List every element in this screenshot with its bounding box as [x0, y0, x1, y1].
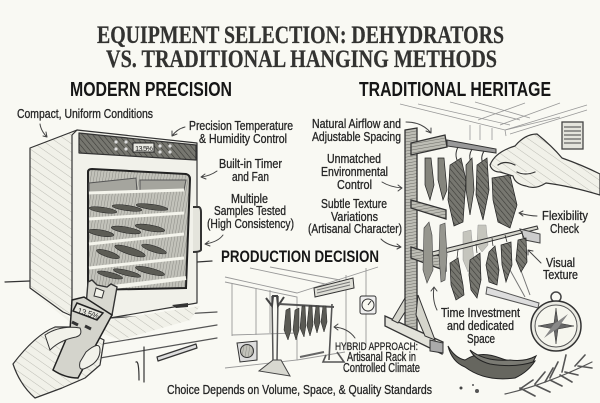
label: time investment: Time Investment	[441, 306, 520, 320]
wall climate unit	[237, 341, 257, 362]
heading: production decision: PRODUCTION DECISION	[221, 247, 379, 266]
illustration: rosemary sprig	[505, 355, 592, 396]
illustration: attic room	[400, 102, 587, 149]
label: unmatched environmental control: Unmatched	[327, 152, 381, 166]
label: compact, uniform conditions: Compact, Uniform Conditions	[17, 107, 153, 121]
display: 13.5%	[135, 144, 153, 153]
back lower jerky	[423, 222, 447, 283]
label: flexibility check	[519, 209, 589, 236]
label: subtle texture variations: (Artisanal Character)	[308, 222, 402, 236]
background lower rack	[486, 268, 539, 308]
title	[97, 22, 504, 73]
window with racks	[88, 169, 190, 290]
label: visual texture: Texture	[543, 268, 578, 282]
label: natural airflow: Natural Airflow and	[312, 117, 401, 131]
heading: modern precision: MODERN PRECISION	[70, 79, 232, 101]
label: built-in timer: Built-in Timer	[219, 157, 282, 171]
illustration: controlled climate room	[225, 267, 378, 376]
label: built-in timer: and Fan	[232, 170, 269, 184]
label: precision temperature: & Humidity Control	[199, 132, 287, 146]
title: EQUIPMENT SELECTION: DEHYDRATORS	[97, 22, 504, 49]
illustration: hanging rack	[385, 128, 540, 354]
faint background jerky	[463, 225, 488, 272]
label: precision temperature	[172, 119, 293, 146]
compass	[531, 292, 581, 351]
label: built-in timer	[201, 157, 282, 184]
label: natural airflow	[312, 117, 431, 144]
wall AC vent	[314, 278, 354, 297]
upper jerky row	[425, 158, 517, 228]
dehydrator front body	[72, 130, 197, 318]
label: visual texture: Visual	[546, 256, 575, 270]
meter screen: 13.5%	[76, 306, 100, 321]
shadow under dehydrator	[30, 290, 200, 340]
illustration: hand holding jerky	[490, 134, 600, 195]
heading: traditional heritage: TRADITIONAL HERITAGE	[359, 79, 551, 101]
label: visual texture	[528, 250, 578, 282]
label: subtle texture variations: Subtle Texture	[321, 197, 387, 211]
illustration: chili peppers	[448, 346, 536, 393]
label: precision temperature: Precision Temperature	[189, 119, 293, 133]
counter and cabinet	[5, 261, 217, 382]
label: hybrid approach: HYBRID APPROACH:	[335, 341, 418, 353]
label: hybrid approach: Artisanal Rack in	[347, 350, 416, 364]
thumb and fingers	[45, 327, 81, 350]
wall vent	[562, 122, 583, 149]
label: unmatched environmental control: Control	[337, 178, 372, 192]
label: multiple samples tested: Multiple	[231, 192, 268, 206]
rack post	[405, 128, 417, 335]
label: time investment: and dedicated	[447, 319, 514, 333]
rack base	[385, 295, 443, 354]
dehydrator foot	[172, 303, 188, 308]
label: flexibility check: Flexibility	[542, 209, 589, 223]
label: flexibility check: Check	[550, 222, 580, 236]
label: multiple samples tested: (High Consistency)	[207, 217, 294, 231]
footer note: Choice Depends on Volume, Space, & Quality Standards	[167, 383, 432, 397]
room walls	[225, 267, 378, 368]
mini jerky	[284, 306, 327, 340]
wall gauge	[360, 296, 376, 314]
label: natural airflow: Adjustable Spacing	[312, 130, 401, 144]
title: VS. TRADITIONAL HANGING METHODS	[106, 46, 497, 73]
label: time investment	[431, 287, 520, 346]
label: subtle texture variations: Variations	[331, 210, 378, 224]
label: hybrid approach: Controlled Climate	[343, 361, 420, 375]
door handle	[193, 207, 201, 252]
label: hybrid approach	[334, 324, 420, 375]
mini rack	[259, 296, 344, 376]
jerky on racks	[88, 202, 168, 281]
illustration: dehydrator	[30, 130, 201, 318]
lower arm and rod	[411, 226, 540, 271]
rack shelves	[89, 190, 186, 290]
label: time investment: Space	[467, 332, 495, 346]
label: multiple samples tested: Samples Tested	[214, 204, 286, 218]
label: multiple samples tested	[205, 192, 294, 246]
label: unmatched environmental control: Environmental	[321, 165, 388, 179]
label: unmatched environmental control	[321, 152, 402, 192]
hand	[13, 327, 104, 398]
control panel	[79, 133, 196, 160]
dehydrator side panel	[30, 130, 77, 316]
top rod and arm	[411, 135, 496, 163]
middle arm	[411, 200, 446, 219]
label: compact, uniform conditions	[17, 107, 153, 137]
label: subtle texture variations	[308, 197, 402, 249]
illustration: hand holding moisture meter	[13, 280, 117, 398]
front lower jerky row	[450, 231, 527, 300]
